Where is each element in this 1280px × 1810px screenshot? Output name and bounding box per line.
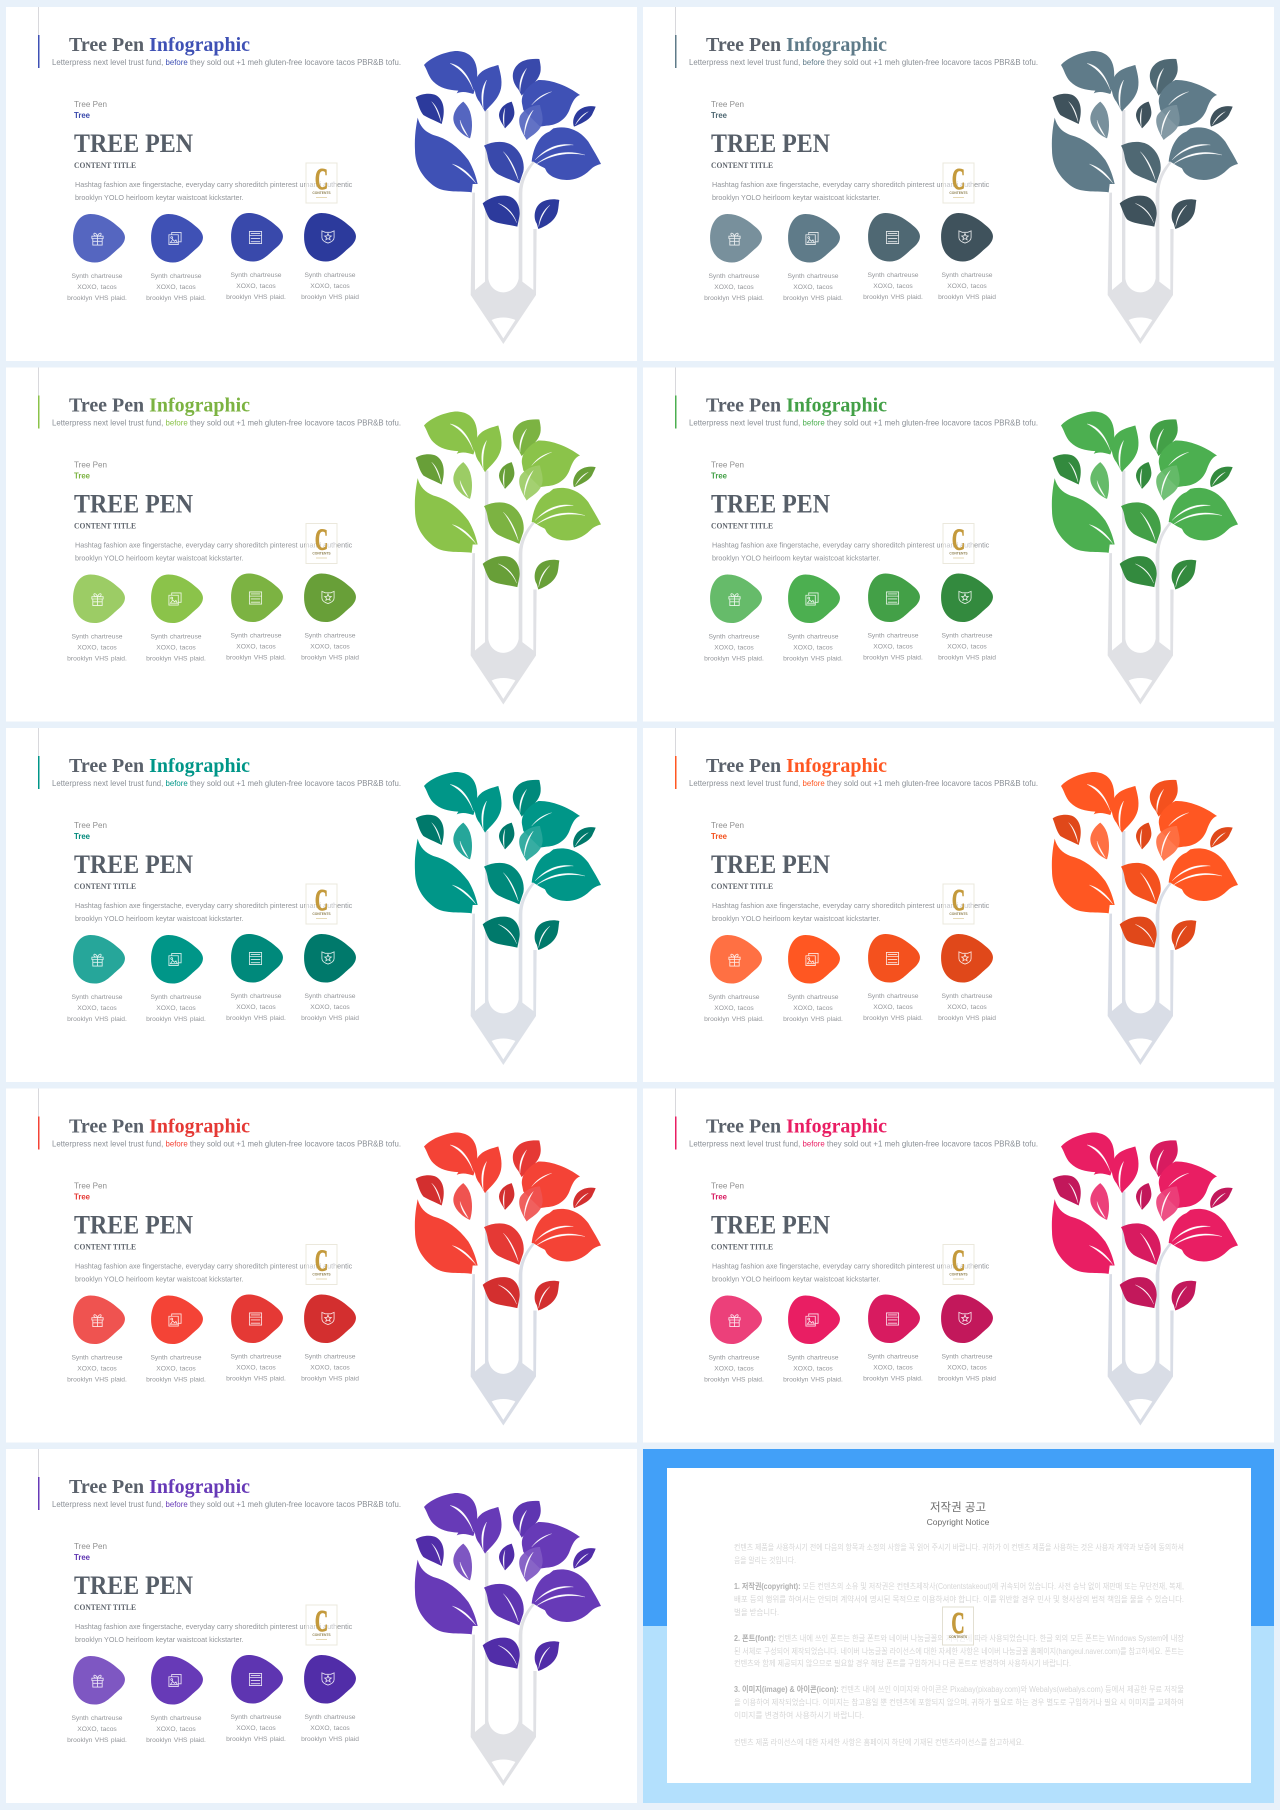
caption 3: brooklyn VHS plaid.	[863, 654, 923, 662]
caption 1: brooklyn VHS plaid.	[67, 295, 127, 302]
body text: Hashtag fashion axe fingerstache, everyday carry shoreditch pinterest umami authentic	[75, 901, 353, 910]
blob icon 1: gift	[73, 935, 125, 984]
blob icon 1: gift	[73, 574, 125, 623]
caption 3: Synth chartreuse	[867, 1354, 919, 1360]
caption 4: Synth chartreuse	[941, 1354, 993, 1360]
blob icon 3: shop	[868, 574, 920, 622]
caption 4: Synth chartreuse	[304, 1714, 356, 1721]
content title: CONTENT TITLE	[74, 882, 136, 891]
caption 3: brooklyn VHS plaid.	[226, 1015, 286, 1022]
body text: Hashtag fashion axe fingerstache, everyday carry shoreditch pinterest umami authentic	[712, 180, 990, 189]
caption 4: brooklyn VHS plaid	[301, 1015, 359, 1022]
panel: light green tree pen slide	[6, 368, 637, 722]
content title: CONTENT TITLE	[74, 1603, 136, 1612]
title: Tree Pen Infographic	[706, 394, 887, 416]
tree pen illustration	[1052, 411, 1238, 704]
blob icon 2: picture	[151, 1296, 203, 1344]
blob icon 2: picture	[788, 935, 840, 984]
accent bar	[38, 1116, 40, 1150]
subtitle: Letterpress next level trust fund, before they sold out +1 meh gluten-free locavore tacos PBR&B tofu.	[689, 57, 1038, 67]
subtitle: Letterpress next level trust fund, before they sold out +1 meh gluten-free locavore tacos PBR&B tofu.	[52, 1499, 401, 1509]
accent bar	[675, 756, 676, 789]
watermark	[942, 1605, 974, 1645]
caption 1: XOXO, tacos	[714, 1366, 754, 1372]
caption 3: XOXO, tacos	[236, 1364, 276, 1372]
watermark: C	[952, 1242, 965, 1278]
caption 2: XOXO, tacos	[156, 284, 196, 291]
caption 2: brooklyn VHS plaid.	[146, 1737, 206, 1744]
heading: TREE PEN	[711, 488, 830, 518]
caption 4: XOXO, tacos	[947, 1004, 987, 1011]
notice title: 저작권 공고	[930, 1501, 986, 1514]
tree pen illustration	[415, 51, 601, 344]
content title: CONTENT TITLE	[74, 522, 136, 530]
panel: green tree pen slide	[643, 368, 1274, 722]
blob icon 1: gift	[710, 214, 762, 262]
caption 2: Synth chartreuse	[150, 1715, 202, 1722]
heading: TREE PEN	[74, 128, 193, 158]
caption 4: XOXO, tacos	[310, 1004, 350, 1011]
notice card	[667, 1468, 1251, 1783]
watermark: C	[952, 161, 965, 196]
blob icon 3: shop	[231, 213, 283, 262]
watermark: CONTENTS	[312, 552, 331, 556]
watermark: C	[315, 1242, 328, 1278]
caption 3: XOXO, tacos	[236, 283, 276, 290]
caption 4: XOXO, tacos	[947, 283, 987, 290]
heading: TREE PEN	[711, 849, 830, 879]
caption 1: brooklyn VHS plaid.	[67, 1016, 127, 1023]
content title: CONTENT TITLE	[711, 1242, 773, 1252]
eyebrow label: Tree Pen	[74, 100, 107, 109]
watermark	[306, 1603, 337, 1645]
caption 1: XOXO, tacos	[77, 644, 117, 652]
caption 3: Synth chartreuse	[867, 993, 919, 1000]
caption 1: brooklyn VHS plaid.	[704, 1016, 764, 1023]
caption 2: brooklyn VHS plaid.	[146, 656, 206, 662]
blob icon 3: shop	[868, 934, 920, 982]
body text: brooklyn YOLO heirloom keytar waistcoat kickstarter.	[712, 554, 880, 562]
caption 2: Synth chartreuse	[787, 994, 839, 1001]
title: Tree Pen Infographic	[69, 755, 250, 777]
panel: red tree pen slide	[6, 1088, 637, 1442]
caption 2: XOXO, tacos	[156, 1005, 196, 1012]
notice body: 배포 등의 행위를 하여서는 안되며 계약서에 명시된 목적으로 이용하셔야 합니다. 이를 위반할 경우 민사 및 형사상의 법적 책임을 물을 수 있습니다.	[734, 1594, 1184, 1604]
watermark	[306, 161, 337, 203]
caption 2: Synth chartreuse	[150, 1354, 202, 1362]
blob icon 1: gift	[73, 1656, 125, 1704]
content title: CONTENT TITLE	[711, 882, 773, 891]
accent bar	[38, 35, 40, 68]
caption 4: brooklyn VHS plaid	[301, 654, 359, 662]
body text: brooklyn YOLO heirloom keytar waistcoat kickstarter.	[75, 193, 243, 202]
watermark: CONTENTS	[312, 912, 331, 916]
heading: TREE PEN	[711, 128, 830, 158]
blob icon 4: shield	[304, 213, 356, 262]
caption 1: XOXO, tacos	[714, 644, 754, 652]
blob icon 2: picture	[151, 574, 203, 623]
blob icon 2: picture	[151, 1656, 203, 1704]
subtitle: Letterpress next level trust fund, before they sold out +1 meh gluten-free locavore tacos PBR&B tofu.	[52, 418, 401, 428]
blob icon 3: shop	[868, 213, 920, 262]
caption 2: brooklyn VHS plaid.	[783, 295, 843, 302]
watermark: C	[315, 522, 328, 556]
title: Tree Pen Infographic	[69, 1116, 250, 1138]
tree pen illustration	[1052, 51, 1238, 344]
caption 1: XOXO, tacos	[77, 1005, 117, 1012]
caption 2: XOXO, tacos	[793, 1366, 833, 1372]
notice body: 2. 폰트(font): 컨텐츠 내에 쓰인 폰트는 한글 폰트와 네이버 나눔글꼴의 저작권에 따라 사용되었습니다. 한글 외의 모든 폰트는 Windows System에 내장	[734, 1633, 1185, 1643]
caption 4: Synth chartreuse	[304, 272, 356, 279]
blob icon 4: shield	[304, 1655, 356, 1704]
caption 3: Synth chartreuse	[867, 272, 919, 279]
caption 2: XOXO, tacos	[156, 1726, 196, 1733]
caption 1: Synth chartreuse	[71, 1715, 123, 1722]
notice body: 1. 저작권(copyright): 모든 컨텐츠의 소유 및 저작권은 컨텐츠제작사(Contentstakeout)에 귀속되어 있습니다. 사전 승낙 없이 재판매 또는 무단전재, 복제,	[734, 1581, 1184, 1591]
watermark: CONTENTS	[949, 1272, 968, 1276]
caption 4: brooklyn VHS plaid	[938, 654, 996, 662]
eyebrow label: Tree Pen	[711, 821, 744, 830]
caption 3: brooklyn VHS plaid.	[226, 1736, 286, 1743]
blob icon 3: shop	[231, 574, 283, 622]
caption 2: Synth chartreuse	[787, 273, 839, 280]
caption 3: brooklyn VHS plaid.	[226, 1376, 286, 1382]
eyebrow label: Tree Pen	[74, 1542, 107, 1551]
caption 2: brooklyn VHS plaid.	[146, 295, 206, 302]
caption 2: XOXO, tacos	[156, 644, 196, 652]
caption 4: brooklyn VHS plaid	[301, 294, 359, 301]
tree pen illustration	[1052, 772, 1238, 1065]
watermark	[943, 522, 974, 564]
accent bar	[38, 1477, 40, 1510]
caption 1: Synth chartreuse	[708, 273, 760, 280]
blob icon 2: picture	[788, 1296, 840, 1344]
body text: brooklyn YOLO heirloom keytar waistcoat kickstarter.	[75, 1635, 243, 1644]
caption 1: brooklyn VHS plaid.	[704, 656, 764, 662]
blob icon 4: shield	[304, 934, 356, 982]
panel: indigo tree pen slide	[6, 7, 637, 361]
caption 4: XOXO, tacos	[947, 1364, 987, 1372]
caption 2: Synth chartreuse	[787, 634, 839, 640]
caption 3: brooklyn VHS plaid.	[226, 654, 286, 662]
subtitle: Letterpress next level trust fund, before they sold out +1 meh gluten-free locavore tacos PBR&B tofu.	[52, 778, 401, 788]
panel: purple tree pen slide	[6, 1449, 637, 1803]
blob icon 1: gift	[73, 214, 125, 262]
caption 3: XOXO, tacos	[873, 1004, 913, 1011]
caption 2: Synth chartreuse	[150, 273, 202, 280]
body text: Hashtag fashion axe fingerstache, everyday carry shoreditch pinterest umami authentic	[75, 1622, 353, 1631]
eyebrow label: Tree Pen	[711, 460, 744, 470]
subtitle: Letterpress next level trust fund, before they sold out +1 meh gluten-free locavore tacos PBR&B tofu.	[52, 57, 401, 67]
blob icon 1: gift	[710, 935, 762, 984]
caption 4: XOXO, tacos	[310, 1725, 350, 1732]
caption 3: brooklyn VHS plaid.	[226, 294, 286, 301]
subtitle: Letterpress next level trust fund, before they sold out +1 meh gluten-free locavore tacos PBR&B tofu.	[689, 778, 1038, 788]
caption 1: brooklyn VHS plaid.	[704, 1376, 764, 1384]
watermark: C	[315, 882, 328, 917]
caption 4: Synth chartreuse	[304, 632, 356, 640]
caption 3: brooklyn VHS plaid.	[863, 1015, 923, 1022]
eyebrow accent: Tree	[74, 1553, 91, 1562]
caption 3: Synth chartreuse	[230, 632, 282, 640]
content title: CONTENT TITLE	[74, 161, 136, 170]
watermark: C	[952, 522, 965, 556]
blob icon 2: picture	[151, 935, 203, 984]
eyebrow label: Tree Pen	[74, 460, 107, 470]
eyebrow accent: Tree	[74, 472, 91, 480]
watermark	[306, 1242, 337, 1284]
caption 4: XOXO, tacos	[310, 644, 350, 650]
caption 2: XOXO, tacos	[793, 1005, 833, 1012]
caption 3: XOXO, tacos	[236, 1004, 276, 1011]
subtitle: Letterpress next level trust fund, before they sold out +1 meh gluten-free locavore tacos PBR&B tofu.	[689, 418, 1038, 428]
watermark: C	[315, 161, 328, 196]
caption 1: brooklyn VHS plaid.	[67, 1737, 127, 1744]
caption 4: XOXO, tacos	[310, 1364, 350, 1372]
content title: CONTENT TITLE	[711, 161, 773, 170]
caption 1: XOXO, tacos	[714, 1005, 754, 1012]
caption 1: brooklyn VHS plaid.	[67, 1376, 127, 1384]
panel: slate tree pen slide	[643, 7, 1274, 361]
body text: Hashtag fashion axe fingerstache, everyday carry shoreditch pinterest umami authentic	[75, 180, 353, 189]
caption 3: brooklyn VHS plaid.	[863, 1376, 923, 1382]
blob icon 3: shop	[231, 1294, 283, 1343]
blob icon 4: shield	[941, 574, 993, 622]
caption 3: XOXO, tacos	[873, 644, 913, 650]
body text: brooklyn YOLO heirloom keytar waistcoat kickstarter.	[712, 914, 880, 923]
caption 3: Synth chartreuse	[230, 1354, 282, 1360]
notice body: 음을 알리는 것입니다.	[734, 1555, 796, 1565]
notice body: 벌을 받습니다.	[734, 1607, 779, 1617]
blob icon 1: gift	[73, 1296, 125, 1344]
heading: TREE PEN	[74, 1570, 193, 1600]
tree pen illustration	[1052, 1132, 1238, 1426]
caption 2: Synth chartreuse	[150, 634, 202, 640]
body text: brooklyn YOLO heirloom keytar waistcoat kickstarter.	[75, 1274, 243, 1284]
eyebrow accent: Tree	[74, 111, 91, 120]
title: Tree Pen Infographic	[69, 34, 250, 56]
panel: copyright notice	[643, 1449, 1274, 1803]
notice body	[734, 1542, 1185, 1747]
body text: Hashtag fashion axe fingerstache, everyday carry shoreditch pinterest umami authentic	[75, 1262, 353, 1270]
accent bar	[675, 396, 676, 428]
caption 3: XOXO, tacos	[236, 644, 276, 650]
caption 1: Synth chartreuse	[71, 273, 123, 280]
caption 3: Synth chartreuse	[867, 632, 919, 640]
notice body: 컨텐츠와 함께 제공되지 않으므로 필요할 경우 해당 폰트를 구입하거나 다른 폰트로 변경하여 사용하시기 바랍니다.	[734, 1658, 1071, 1668]
caption 4: Synth chartreuse	[941, 632, 993, 640]
eyebrow label: Tree Pen	[74, 1182, 107, 1190]
notice body: 컨텐츠 제품을 사용하시기 전에 다음의 항목과 소정의 사항을 꼭 읽어 주시기 바랍니다. 귀하가 이 컨텐츠 제품을 사용하는 것은 사용자 계약과 보증에 동의하셔	[734, 1542, 1184, 1552]
caption 2: XOXO, tacos	[156, 1366, 196, 1372]
blob icon 4: shield	[941, 1294, 993, 1343]
caption 1: XOXO, tacos	[77, 1726, 117, 1733]
caption 2: brooklyn VHS plaid.	[783, 656, 843, 662]
caption 2: brooklyn VHS plaid.	[783, 1376, 843, 1384]
blob icon 4: shield	[941, 934, 993, 982]
watermark: CONTENTS	[949, 912, 968, 916]
notice body: 된 서체로 구성되어 제작되었습니다. 네이버 나눔글꼴 라이선스에 대한 자세한 사항은 네이버 나눔글꼴 홈페이지(hangeul.naver.com)를 참고하세요. 폰트는	[734, 1646, 1184, 1656]
caption 4: brooklyn VHS plaid	[938, 294, 996, 301]
caption 3: XOXO, tacos	[873, 1364, 913, 1372]
body text: brooklyn YOLO heirloom keytar waistcoat kickstarter.	[75, 914, 243, 923]
caption 1: Synth chartreuse	[71, 1354, 123, 1362]
caption 2: brooklyn VHS plaid.	[146, 1016, 206, 1023]
heading: TREE PEN	[74, 849, 193, 879]
title: Tree Pen Infographic	[69, 1476, 250, 1498]
blob icon 1: gift	[710, 1296, 762, 1344]
caption 4: Synth chartreuse	[941, 272, 993, 279]
tree pen illustration	[415, 772, 601, 1065]
watermark: CONTENTS	[949, 1635, 968, 1639]
caption 2: Synth chartreuse	[150, 994, 202, 1001]
caption 3: brooklyn VHS plaid.	[863, 294, 923, 301]
blob icon 3: shop	[868, 1294, 920, 1343]
tree pen illustration	[415, 1493, 601, 1786]
watermark: C	[952, 882, 965, 917]
eyebrow accent: Tree	[711, 472, 728, 480]
eyebrow accent: Tree	[711, 1192, 728, 1202]
caption 1: Synth chartreuse	[708, 994, 760, 1001]
watermark	[943, 161, 974, 203]
watermark: CONTENTS	[312, 1272, 331, 1276]
panel: orange tree pen slide	[643, 728, 1274, 1082]
caption 1: brooklyn VHS plaid.	[704, 295, 764, 302]
accent bar	[675, 35, 676, 68]
notice body: 을 이용하여 제작되었습니다. 이미지는 참고용일 뿐 컨텐츠에 포함되지 않으며, 귀하가 필요로 하는 경우 별도로 구입하거나 필요 시 이미지를 교체하여	[734, 1697, 1184, 1707]
tree pen illustration	[415, 411, 601, 704]
eyebrow label: Tree Pen	[74, 821, 107, 830]
caption 1: Synth chartreuse	[708, 1354, 760, 1362]
blob icon 3: shop	[231, 1655, 283, 1704]
caption 2: brooklyn VHS plaid.	[783, 1016, 843, 1023]
watermark	[306, 882, 337, 924]
title: Tree Pen Infographic	[69, 394, 250, 416]
eyebrow label: Tree Pen	[711, 1182, 744, 1190]
accent bar	[675, 1116, 676, 1150]
eyebrow accent: Tree	[74, 1192, 91, 1202]
content title: CONTENT TITLE	[74, 1242, 136, 1252]
caption 4: Synth chartreuse	[941, 993, 993, 1000]
caption 2: XOXO, tacos	[793, 644, 833, 652]
blob icon 4: shield	[304, 1294, 356, 1343]
tree pen illustration	[415, 1132, 601, 1426]
blob icon 4: shield	[941, 213, 993, 262]
notice body: 이미지를 변경하여 사용하시기 바랍니다.	[734, 1710, 864, 1720]
watermark	[306, 522, 337, 564]
panel: teal tree pen slide	[6, 728, 637, 1082]
notice body: 3. 이미지(image) & 아이콘(icon): 컨텐츠 내에 쓰인 이미지와 아이콘은 Pixabay(pixabay.com)와 Webalys(webalys.com) 등에서 제공한 무료 저작물	[734, 1684, 1184, 1694]
watermark	[943, 1242, 974, 1284]
caption 3: XOXO, tacos	[236, 1725, 276, 1732]
body text: Hashtag fashion axe fingerstache, everyday carry shoreditch pinterest umami authentic	[712, 901, 990, 910]
caption 4: Synth chartreuse	[304, 1354, 356, 1360]
watermark: CONTENTS	[949, 191, 968, 195]
caption 1: brooklyn VHS plaid.	[67, 656, 127, 662]
blob icon 3: shop	[231, 934, 283, 982]
caption 4: brooklyn VHS plaid	[938, 1376, 996, 1382]
caption 3: Synth chartreuse	[230, 272, 282, 279]
caption 4: brooklyn VHS plaid	[301, 1376, 359, 1382]
body text: brooklyn YOLO heirloom keytar waistcoat kickstarter.	[712, 1274, 880, 1284]
blob icon 4: shield	[304, 574, 356, 622]
heading: TREE PEN	[74, 488, 193, 518]
watermark: CONTENTS	[312, 191, 331, 195]
accent bar	[38, 396, 40, 428]
subtitle: Letterpress next level trust fund, before they sold out +1 meh gluten-free locavore tacos PBR&B tofu.	[689, 1138, 1038, 1148]
notice subtitle: Copyright Notice	[927, 1517, 990, 1527]
caption 2: Synth chartreuse	[787, 1354, 839, 1362]
watermark	[943, 882, 974, 924]
caption 4: Synth chartreuse	[304, 993, 356, 1000]
caption 3: Synth chartreuse	[230, 993, 282, 1000]
caption 3: Synth chartreuse	[230, 1714, 282, 1721]
caption 2: brooklyn VHS plaid.	[146, 1376, 206, 1384]
body text: Hashtag fashion axe fingerstache, everyday carry shoreditch pinterest umami authentic	[712, 540, 990, 550]
watermark: C	[952, 1605, 964, 1640]
body text: brooklyn YOLO heirloom keytar waistcoat kickstarter.	[75, 554, 243, 562]
caption 3: XOXO, tacos	[873, 283, 913, 290]
blob icon 2: picture	[788, 574, 840, 623]
notice body: 컨텐츠 제품 라이선스에 대한 자세한 사항은 홈페이지 하단에 기재된 컨텐츠라이선스를 참고하세요.	[734, 1737, 1024, 1747]
watermark: CONTENTS	[949, 552, 968, 556]
caption 4: brooklyn VHS plaid	[301, 1736, 359, 1743]
caption 1: XOXO, tacos	[77, 284, 117, 291]
caption 4: XOXO, tacos	[310, 283, 350, 290]
caption 4: brooklyn VHS plaid	[938, 1015, 996, 1022]
caption 1: Synth chartreuse	[71, 634, 123, 640]
title: Tree Pen Infographic	[706, 34, 887, 56]
caption 1: Synth chartreuse	[708, 634, 760, 640]
blob icon 1: gift	[710, 574, 762, 623]
caption 1: XOXO, tacos	[714, 284, 754, 291]
eyebrow label: Tree Pen	[711, 100, 744, 109]
caption 2: XOXO, tacos	[793, 284, 833, 291]
blob icon 2: picture	[151, 214, 203, 262]
heading: TREE PEN	[74, 1210, 193, 1240]
caption 4: XOXO, tacos	[947, 644, 987, 650]
title: Tree Pen Infographic	[706, 1116, 887, 1138]
caption 1: XOXO, tacos	[77, 1366, 117, 1372]
body text: brooklyn YOLO heirloom keytar waistcoat kickstarter.	[712, 193, 880, 202]
watermark: C	[315, 1603, 328, 1638]
watermark: CONTENTS	[312, 1633, 331, 1637]
title: Tree Pen Infographic	[706, 755, 887, 777]
content title: CONTENT TITLE	[711, 522, 773, 530]
eyebrow accent: Tree	[711, 111, 728, 120]
body text: Hashtag fashion axe fingerstache, everyday carry shoreditch pinterest umami authentic	[712, 1262, 990, 1270]
subtitle: Letterpress next level trust fund, before they sold out +1 meh gluten-free locavore tacos PBR&B tofu.	[52, 1138, 401, 1148]
body text: Hashtag fashion axe fingerstache, everyday carry shoreditch pinterest umami authentic	[75, 540, 353, 550]
blob icon 2: picture	[788, 214, 840, 262]
heading: TREE PEN	[711, 1210, 830, 1240]
panel: pink tree pen slide	[643, 1088, 1274, 1442]
eyebrow accent: Tree	[74, 832, 91, 841]
eyebrow accent: Tree	[711, 832, 728, 841]
accent bar	[38, 756, 40, 789]
caption 1: Synth chartreuse	[71, 994, 123, 1001]
